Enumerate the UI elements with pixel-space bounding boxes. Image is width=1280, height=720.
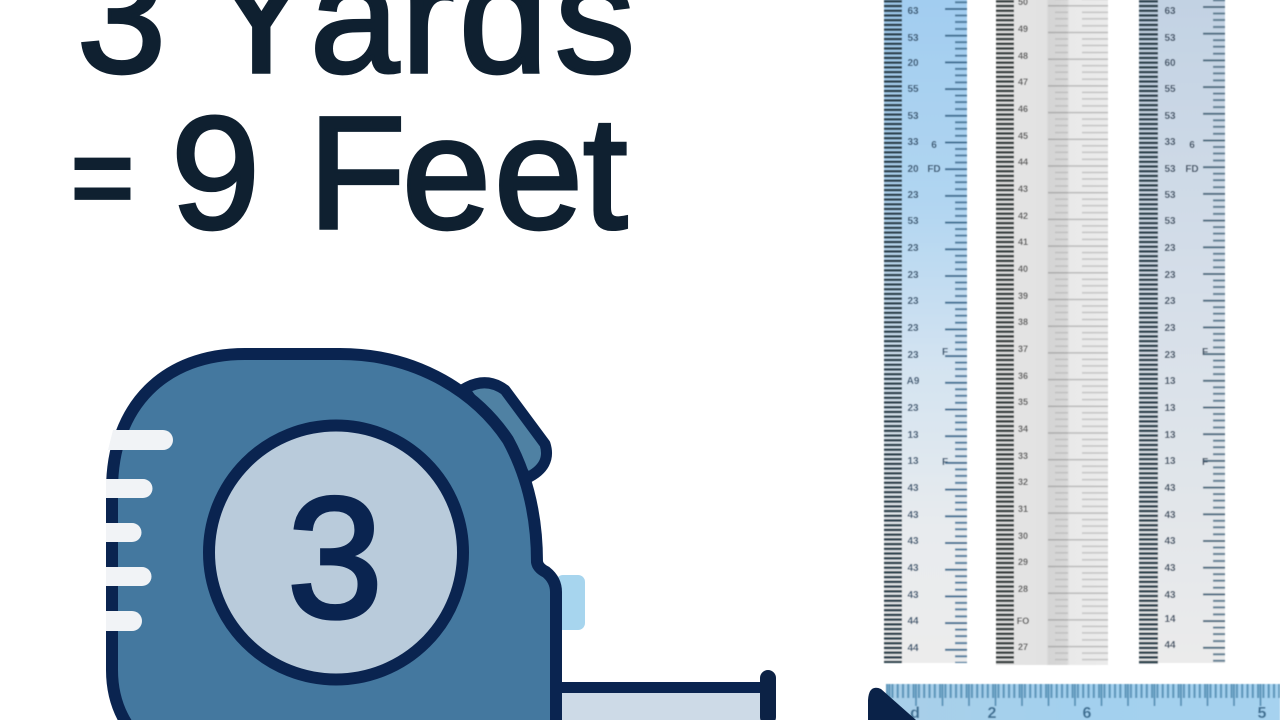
ruler 3 numbers: 33 bbox=[1164, 137, 1176, 148]
ruler 1 numbers: 55 bbox=[907, 84, 919, 95]
ruler 3 numbers: F bbox=[1202, 347, 1208, 358]
ruler 3 numbers: 53 bbox=[1164, 111, 1176, 122]
ruler 2 numbers: 49 bbox=[1018, 24, 1028, 34]
ruler 3 numbers: 23 bbox=[1164, 243, 1176, 254]
ruler 1 numbers: 53 bbox=[907, 216, 919, 227]
ruler 3 numbers: 53 bbox=[1164, 33, 1176, 44]
ruler 3 numbers: 13 bbox=[1164, 456, 1176, 467]
ruler 1 numbers: 43 bbox=[907, 483, 919, 494]
lock button bbox=[556, 575, 585, 630]
ruler 1 numbers: 13 bbox=[907, 456, 919, 467]
ruler 1 numbers: F bbox=[942, 457, 948, 468]
dial circle with number 3: 3 bbox=[287, 462, 383, 654]
ruler 1 numbers: 43 bbox=[907, 563, 919, 574]
bottom ruler numbers bbox=[910, 705, 1267, 720]
ruler 2 numbers: 41 bbox=[1018, 237, 1028, 247]
ruler 2 numbers: 27 bbox=[1018, 642, 1028, 652]
ruler 1 numbers: A9 bbox=[907, 376, 920, 387]
grip marks bbox=[106, 430, 173, 631]
top tab bbox=[464, 383, 547, 478]
title equals sign: = bbox=[71, 111, 134, 244]
ruler 3 numbers: FD bbox=[1185, 164, 1199, 175]
ruler 3 numbers: 23 bbox=[1164, 270, 1176, 281]
ruler 3 numbers: 63 bbox=[1164, 6, 1176, 17]
ruler 3 numbers: 53 bbox=[1164, 164, 1176, 175]
ruler 1 numbers: 33 bbox=[907, 137, 919, 148]
ruler 1 numbers bbox=[907, 6, 948, 654]
ruler 2 numbers: 47 bbox=[1018, 77, 1028, 87]
ruler 2 numbers: 36 bbox=[1018, 371, 1028, 381]
ruler 2 numbers: 32 bbox=[1018, 477, 1028, 487]
ruler 2 numbers: 34 bbox=[1018, 424, 1028, 434]
ruler 1 numbers: 20 bbox=[907, 58, 919, 69]
ruler 3 numbers: 13 bbox=[1164, 403, 1176, 414]
ruler 3 numbers: 43 bbox=[1164, 590, 1176, 601]
ruler 1 numbers: 23 bbox=[907, 323, 919, 334]
ruler 2 numbers: 48 bbox=[1018, 51, 1028, 61]
ruler 3 numbers: 53 bbox=[1164, 190, 1176, 201]
icon: tape measure bbox=[106, 354, 776, 720]
ruler: steel blue vertical bbox=[1139, 0, 1225, 664]
ruler 2 numbers: 43 bbox=[1018, 184, 1028, 194]
ruler 2 numbers: 40 bbox=[1018, 264, 1028, 274]
ruler 3 numbers: 23 bbox=[1164, 350, 1176, 361]
ruler 1 numbers: 23 bbox=[907, 296, 919, 307]
ruler 3 numbers: 6 bbox=[1189, 140, 1195, 151]
ruler: blue vertical bbox=[884, 0, 967, 663]
ruler: grey vertical bbox=[996, 0, 1108, 665]
ruler 3 numbers: 23 bbox=[1164, 323, 1176, 334]
ruler 1 numbers: 23 bbox=[907, 403, 919, 414]
ruler 3 numbers: 13 bbox=[1164, 430, 1176, 441]
ruler 2 numbers: 46 bbox=[1018, 104, 1028, 114]
ruler 2 numbers: 30 bbox=[1018, 531, 1028, 541]
ruler 3 numbers: F bbox=[1202, 457, 1208, 468]
ruler 1 numbers: 63 bbox=[907, 6, 919, 17]
ruler 1 numbers: 43 bbox=[907, 510, 919, 521]
tape blade bbox=[556, 670, 776, 720]
ruler 1 numbers: F bbox=[942, 347, 948, 358]
ruler 2 numbers: 42 bbox=[1018, 211, 1028, 221]
ruler 2 numbers: 29 bbox=[1018, 557, 1028, 567]
title line 2: 9 Feet bbox=[171, 83, 627, 262]
ruler 2 numbers: 44 bbox=[1018, 157, 1028, 167]
ruler 3 numbers: 53 bbox=[1164, 216, 1176, 227]
ruler 2 numbers: 37 bbox=[1018, 344, 1028, 354]
ruler 3 numbers: 13 bbox=[1164, 376, 1176, 387]
ruler 3 numbers bbox=[1164, 6, 1208, 651]
tape case bbox=[112, 354, 556, 720]
ruler 2 numbers: 35 bbox=[1018, 397, 1028, 407]
ruler 1 numbers: 44 bbox=[907, 616, 919, 627]
ruler 1 numbers: 43 bbox=[907, 590, 919, 601]
ruler 3 numbers: 55 bbox=[1164, 84, 1176, 95]
ruler 1 numbers: 53 bbox=[907, 33, 919, 44]
ruler 1 numbers: 53 bbox=[907, 111, 919, 122]
ruler 3 numbers: 43 bbox=[1164, 483, 1176, 494]
title: 3 Yards = 9 Feet bbox=[71, 0, 635, 262]
ruler 1 numbers: 23 bbox=[907, 243, 919, 254]
ruler 1 numbers: 6 bbox=[931, 140, 937, 151]
ruler 2 numbers: 31 bbox=[1018, 504, 1028, 514]
ruler 1 numbers: 13 bbox=[907, 430, 919, 441]
ruler 2 numbers: 45 bbox=[1018, 131, 1028, 141]
ruler 3 numbers: 43 bbox=[1164, 536, 1176, 547]
ruler 3 numbers: 43 bbox=[1164, 563, 1176, 574]
ruler 2 numbers: 33 bbox=[1018, 451, 1028, 461]
ruler 1 numbers: 20 bbox=[907, 164, 919, 175]
ruler 2 numbers: 28 bbox=[1018, 584, 1028, 594]
ruler 2 numbers: 38 bbox=[1018, 317, 1028, 327]
ruler 1 numbers: 23 bbox=[907, 190, 919, 201]
ruler 1 numbers: 23 bbox=[907, 270, 919, 281]
ruler 3 numbers: 14 bbox=[1164, 614, 1176, 625]
ruler 2 numbers: 39 bbox=[1018, 291, 1028, 301]
ruler 3 numbers: 43 bbox=[1164, 510, 1176, 521]
ruler corner triangle bbox=[868, 688, 916, 720]
ruler 3 numbers: 44 bbox=[1164, 640, 1176, 651]
ruler 2 numbers bbox=[1017, 0, 1029, 652]
ruler 3 numbers: 23 bbox=[1164, 296, 1176, 307]
ruler: horizontal blue bbox=[886, 684, 1280, 720]
ruler 1 numbers: 43 bbox=[907, 536, 919, 547]
ruler 2 numbers: FO bbox=[1017, 616, 1029, 626]
ruler 1 numbers: 44 bbox=[907, 643, 919, 654]
dial circle with number 3 bbox=[209, 426, 463, 680]
ruler 1 numbers: 23 bbox=[907, 350, 919, 361]
ruler 1 numbers: FD bbox=[927, 164, 941, 175]
ruler 3 numbers: 60 bbox=[1164, 58, 1176, 69]
